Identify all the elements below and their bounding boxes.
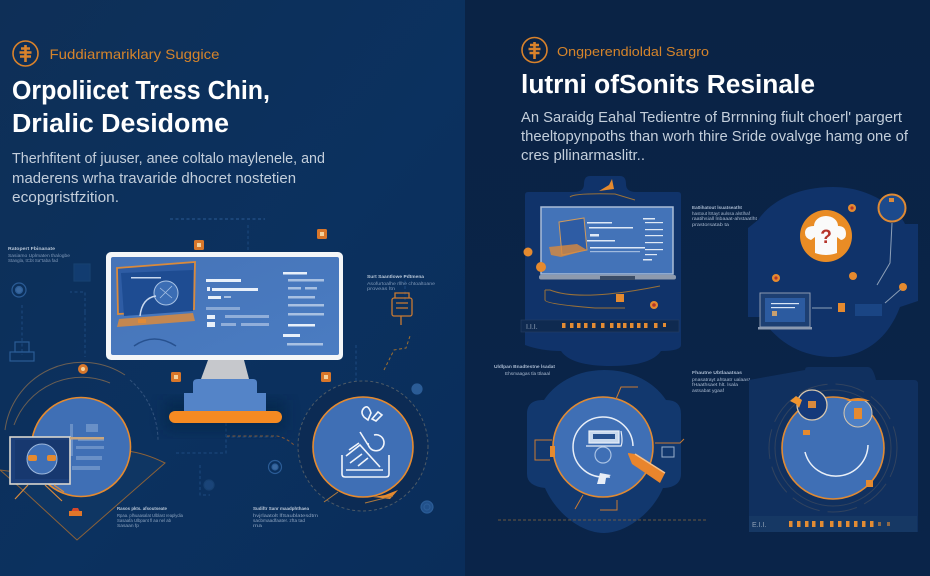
top right caption: hastout ltrtayt aulssa alstlhaf bbox=[692, 211, 751, 216]
screen picture bbox=[117, 262, 195, 346]
left eyebrow: Fuddiarmariklary Suggice bbox=[50, 46, 220, 62]
white smile arc bbox=[805, 445, 868, 476]
left faint icons bbox=[10, 264, 433, 513]
bottom center caption bbox=[692, 370, 751, 393]
icon: target top left bbox=[12, 283, 26, 297]
caption: top left bbox=[8, 246, 71, 263]
right header block bbox=[521, 38, 909, 164]
node: stand left bbox=[171, 372, 181, 382]
caption: bottom center-left: Rasos pkts. afsoutseate bbox=[117, 506, 167, 511]
caption: bottom center-left: Rpaa. plhuaasalat Ulblast reaplydia bbox=[117, 513, 183, 518]
toolbar icons bbox=[562, 323, 666, 328]
top right caption: Ea0ihatout lsuatseatht bbox=[692, 205, 743, 210]
diamond outline bbox=[0, 451, 165, 540]
white circular arrow bbox=[573, 417, 633, 477]
monitor illustration bbox=[106, 252, 343, 430]
small framed display bbox=[10, 437, 104, 501]
right badge bbox=[844, 398, 872, 427]
monitor screen bbox=[111, 257, 339, 355]
icon: device bottom left bbox=[10, 342, 34, 361]
toolbar label: I.I.I. bbox=[526, 324, 538, 331]
caption: Ehsmaagas tla ttlaaal bbox=[505, 371, 550, 376]
small laptop bbox=[758, 293, 832, 330]
top right caption: raatihsiall lnbaaat-ahstaatlht bbox=[692, 216, 758, 221]
panel: right background bbox=[465, 0, 930, 576]
right body text: theeltopynpoths than worh thire Sride ovalvge hamg one of bbox=[521, 128, 909, 145]
orange nodes bbox=[772, 204, 907, 291]
toolbar label: E.I.I. bbox=[752, 522, 766, 529]
icon: device bbox=[586, 431, 622, 463]
circle texture bbox=[70, 424, 104, 470]
screen art bbox=[549, 218, 663, 260]
icon: right emblem bbox=[522, 38, 547, 62]
orange disc with question mark bbox=[800, 210, 852, 262]
left badge bbox=[790, 390, 827, 420]
orange marker bbox=[550, 446, 555, 457]
monitor shadow bbox=[165, 400, 285, 430]
left small captions bbox=[8, 246, 436, 528]
rings bbox=[5, 362, 158, 440]
caption: top left: Ratopert Fbinanate bbox=[8, 246, 56, 251]
icon: right bottom badge bbox=[421, 501, 433, 513]
caption: bottom center-right: ma bbox=[253, 523, 263, 528]
top right blob: laptop bbox=[521, 176, 681, 366]
orange disc with question mark: ? bbox=[820, 227, 832, 248]
orange connectors bbox=[535, 387, 684, 510]
caption: bottom center-left: Sasaafa Ulbpant fl aa nel ab bbox=[117, 518, 171, 523]
node: top bbox=[194, 240, 204, 250]
icon: left emblem bbox=[13, 41, 38, 66]
caption: top right: Surt Saantlowe Pdtmena bbox=[367, 274, 425, 279]
panel: blob bbox=[527, 370, 681, 533]
icon: basket with swirl bbox=[342, 407, 389, 477]
orange nodes bbox=[524, 179, 658, 309]
toolbar icons bbox=[789, 521, 890, 527]
laptop base bbox=[539, 275, 676, 280]
left title: Drialic Desidome bbox=[12, 110, 229, 138]
top right caption bbox=[692, 205, 758, 227]
icon: right top badge bbox=[412, 384, 422, 394]
orange nodes bbox=[78, 229, 414, 416]
right circle diagram bbox=[298, 381, 428, 511]
monitor orange base bbox=[169, 411, 282, 423]
small node link bbox=[838, 289, 901, 316]
icon: orange clipboard bbox=[392, 293, 412, 325]
small orange marks bbox=[803, 430, 873, 487]
panel: left background bbox=[0, 0, 465, 576]
icon: cube top bbox=[74, 264, 90, 281]
toolbar strip bbox=[521, 320, 679, 332]
laptop screen bbox=[541, 207, 673, 274]
monitor stand neck bbox=[201, 360, 249, 379]
monitor stand steps bbox=[184, 379, 266, 411]
bottom right blob bbox=[749, 367, 918, 532]
caption: bottom center-right bbox=[253, 506, 318, 528]
caption bbox=[494, 364, 556, 376]
blue disc bbox=[782, 397, 884, 499]
right title: lutrni ofSonits Resinale bbox=[521, 71, 815, 99]
caption: top left: Sasiamo Uplmaten thalogbe bbox=[8, 253, 71, 258]
top right caption: prastorsatab ta bbox=[692, 222, 730, 227]
icon: small red badge bbox=[69, 508, 82, 516]
node: stand right bbox=[321, 372, 331, 382]
right body text: cres pllinarmaslitr.. bbox=[521, 147, 645, 164]
small device bbox=[662, 447, 674, 457]
dashed strip bbox=[498, 519, 708, 521]
caption: Uldlpan Bnadtestne lsadat bbox=[494, 364, 556, 369]
caption: bottom center-right: Sudiftr Sanr maadphthaea bbox=[253, 506, 309, 511]
orange pencil bbox=[628, 453, 665, 483]
node: ring left bbox=[78, 364, 88, 374]
right eyebrow: Ongperendioldal Sargro bbox=[557, 44, 709, 59]
circle disc bbox=[553, 397, 653, 497]
caption: bottom center-left bbox=[117, 506, 183, 528]
icon: dim badge bbox=[268, 460, 282, 474]
left title: Orpoliicet Tress Chin, bbox=[12, 77, 270, 105]
connector bbox=[324, 492, 393, 503]
node: top right bbox=[317, 229, 327, 239]
dark halo bbox=[298, 381, 428, 511]
blue disc bbox=[313, 397, 413, 497]
decorative connectors bbox=[545, 194, 660, 308]
panel: blob bbox=[749, 367, 918, 532]
bottom center caption: Fhautne Ubtlaaatsas bbox=[692, 370, 743, 375]
orange marker bbox=[373, 490, 398, 499]
toolbar strip bbox=[749, 516, 917, 532]
bottom center caption: pnasatrayt ahtaatr ualaast bbox=[692, 377, 751, 382]
caption: bottom center-right: hvjrlaatolt lfSaublatesdtm bbox=[253, 513, 318, 518]
caption: top left: Stangla, tCbt Sa"taba fad bbox=[8, 258, 58, 263]
panel: blob bbox=[522, 176, 681, 366]
rings bbox=[769, 384, 897, 512]
ring with stem bbox=[877, 194, 906, 285]
left body text: Therhfitent of juuser, anee coltalo maylenele, and bbox=[12, 150, 325, 167]
left header block bbox=[12, 41, 325, 206]
caption: bottom center-left: Sasaan fp bbox=[117, 523, 140, 528]
caption: top right: proveas ltn bbox=[367, 286, 396, 291]
left connector lines bbox=[22, 219, 410, 495]
panel: blob bbox=[748, 187, 918, 357]
node: ring right bbox=[406, 408, 414, 416]
right body text: An Saraidg Eahal Tedientre of Brrnning fiult choerl' pargert bbox=[521, 109, 903, 126]
caption: top right: Asofurtoalhe rllhe chtoaltoane bbox=[367, 281, 436, 286]
icon: small globe bbox=[204, 480, 214, 490]
left body text: maderens wrha travaride dhocret nostetien bbox=[12, 170, 296, 187]
caption: top right bbox=[367, 274, 436, 291]
monitor frame bbox=[106, 252, 343, 360]
screen text lines bbox=[206, 272, 324, 346]
top right blob: question bbox=[748, 187, 918, 357]
bottom center caption: astsabat ygaaf bbox=[692, 388, 725, 393]
blue circle bbox=[32, 398, 130, 496]
bottom left blob bbox=[494, 364, 708, 533]
caption: bottom center-right: sacbmaadfaater. zfta tad bbox=[253, 518, 306, 523]
left circle diagram bbox=[0, 362, 165, 540]
left body text: ecopgristfzition. bbox=[12, 189, 119, 206]
bottom center caption: fHaathsaet hlt. lsala bbox=[692, 382, 739, 387]
